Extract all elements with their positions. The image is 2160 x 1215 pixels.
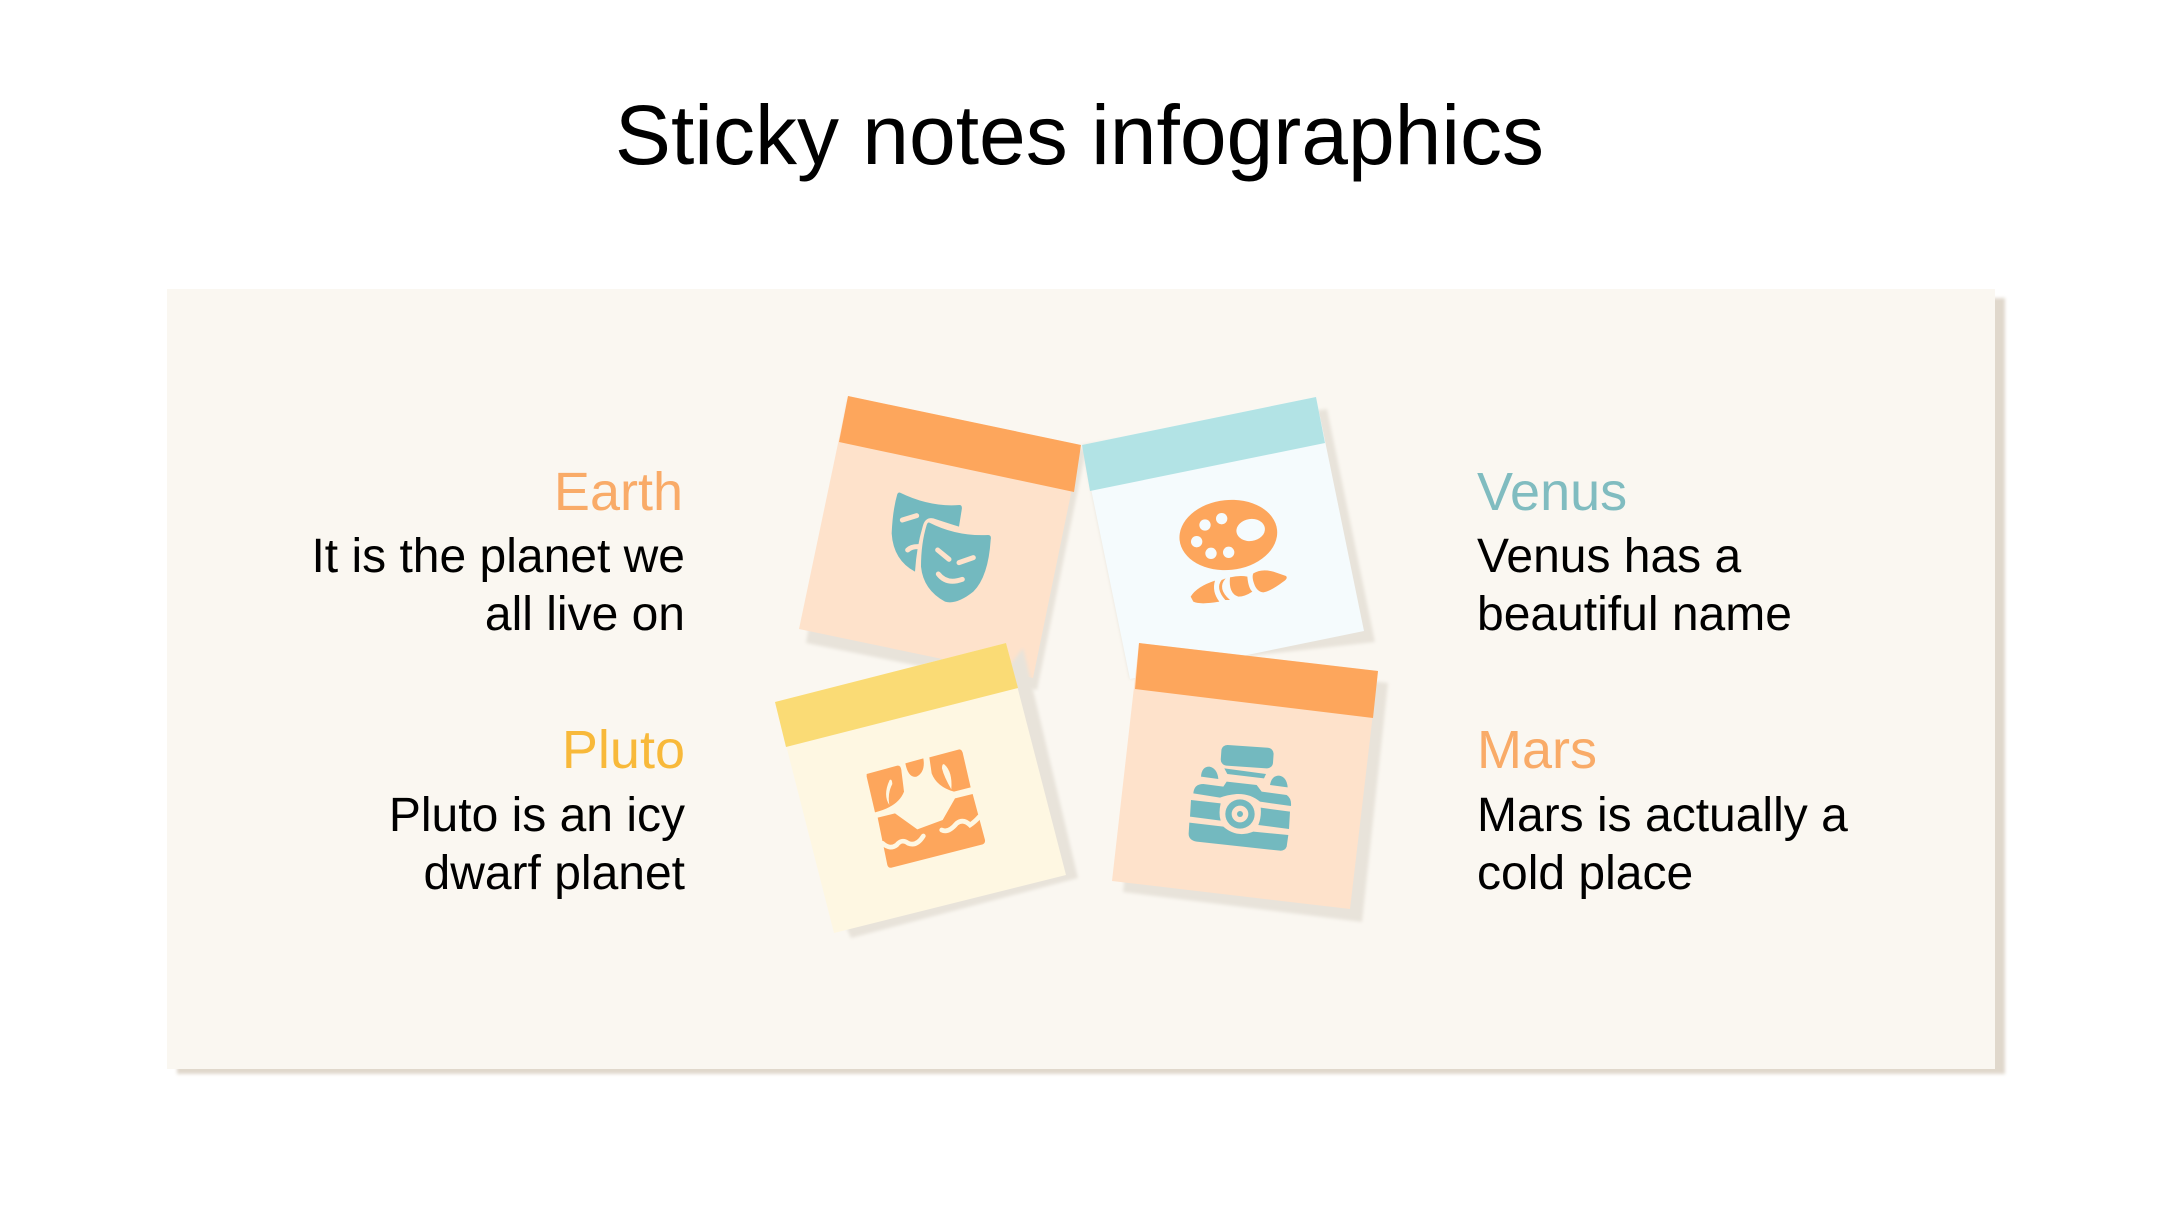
text block: Venus: Venus has a xyxy=(1477,530,1742,583)
icon: camera xyxy=(1189,745,1291,851)
panel: background xyxy=(167,289,2005,1074)
sticky note: Earth xyxy=(799,396,1086,690)
sticky note: Pluto xyxy=(775,643,1078,938)
icon: stage curtains xyxy=(867,749,985,868)
text block: Mars xyxy=(1477,720,1848,900)
text block: Mars: cold place xyxy=(1477,847,1693,900)
text block: Pluto xyxy=(389,720,685,900)
text block: Pluto: dwarf planet xyxy=(424,847,685,900)
text block: Venus: Venus xyxy=(1477,462,1627,522)
text block: Pluto: Pluto is an icy xyxy=(389,789,685,842)
icon: theatre masks xyxy=(892,492,991,602)
text block: Earth: Earth xyxy=(554,462,683,522)
text block: Mars: Mars xyxy=(1477,720,1597,780)
icon: palette and brush xyxy=(1176,495,1287,603)
sticky note: Venus xyxy=(1082,397,1375,679)
text block: Earth: It is the planet we xyxy=(311,530,685,583)
sticky note: Mars xyxy=(1112,643,1388,922)
text block: Pluto: Pluto xyxy=(562,720,685,780)
text block: Venus xyxy=(1477,462,1792,641)
title: Sticky notes infographics xyxy=(615,88,1544,182)
text block: Earth: all live on xyxy=(485,588,685,641)
text block: Earth xyxy=(311,462,685,641)
text block: Mars: Mars is actually a xyxy=(1477,789,1848,842)
text block: Venus: beautiful name xyxy=(1477,588,1792,641)
